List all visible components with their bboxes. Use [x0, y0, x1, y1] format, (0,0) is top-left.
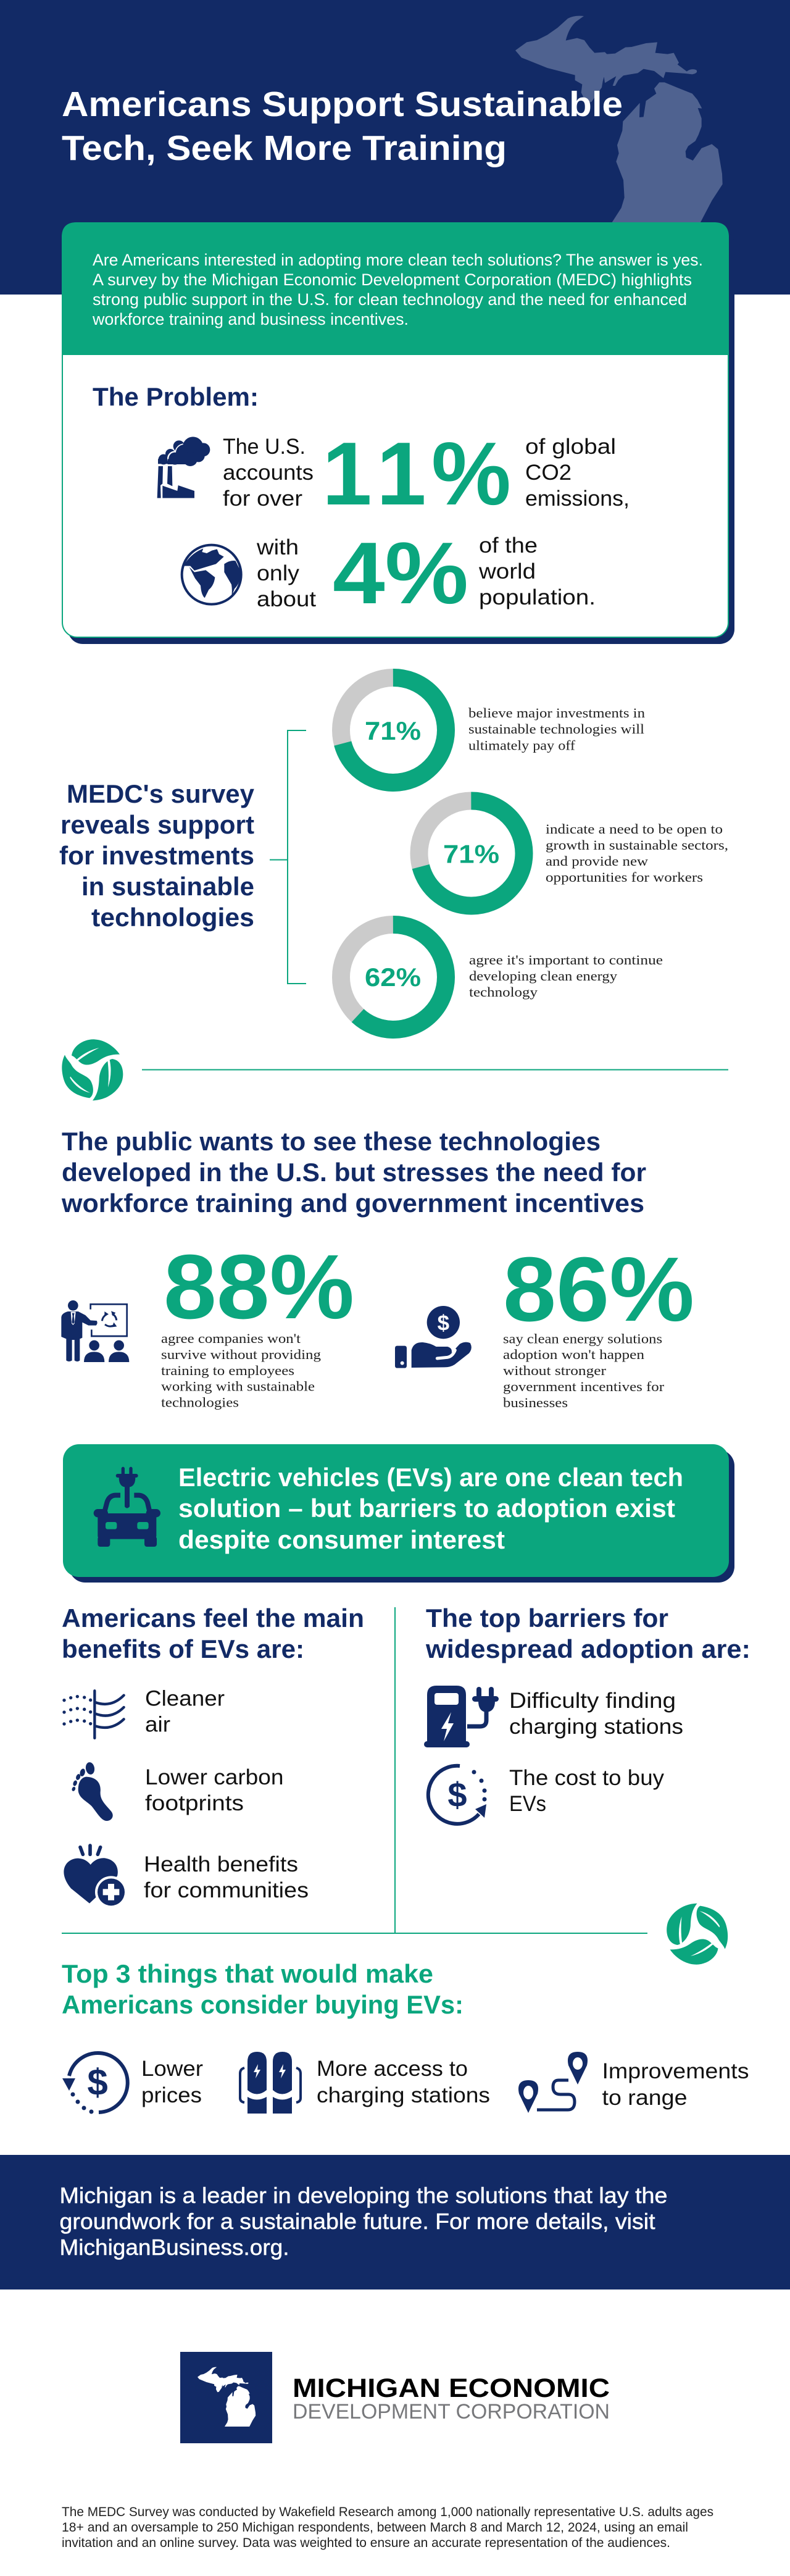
intro text block: workforce training and business incentives.	[92, 310, 409, 328]
text: donut 1 description	[468, 705, 645, 753]
stat: 86 percent: businesses	[503, 1395, 568, 1410]
icon: lower prices: $	[87, 2062, 108, 2103]
closing text: groundwork for a sustainable future. For more details, visit	[59, 2209, 655, 2234]
text: more access: More access to	[317, 2057, 468, 2081]
stat: 11 percent: for over	[223, 487, 302, 511]
text: donut 2 description: and provide new	[546, 853, 648, 869]
text: donut 2 description: opportunities for workers	[546, 869, 703, 885]
heading: public wants these technologies: The public wants to see these technologies	[62, 1127, 601, 1156]
stat: 4 percent: about	[257, 587, 316, 611]
stat: 4 percent: 4%	[333, 524, 468, 622]
footnote: survey methodology: The MEDC Survey was conducted by Wakefield Research among 1,000 nationally representative U.S. adults ages	[62, 2505, 713, 2519]
stat: 88 percent: agree companies won't	[161, 1331, 301, 1346]
closing text: MichiganBusiness.org.	[59, 2235, 289, 2260]
logo: Michigan Economic Development Corporation	[180, 2352, 610, 2443]
icon: hand holding dollar	[395, 1306, 472, 1368]
text: donut 2 description: growth in sustainable sectors,	[546, 837, 728, 853]
donut: 71 percent growth: 71%	[443, 840, 499, 868]
text: improvements	[602, 2059, 749, 2110]
text: health benefits	[144, 1852, 309, 1902]
stat: 4 percent: world	[478, 559, 536, 583]
stat: 88 percent	[161, 1236, 354, 1410]
stat: 11 percent: The U.S.	[223, 435, 306, 459]
stat: 4 percent: population.	[479, 585, 596, 609]
icon: factory emissions	[157, 437, 210, 498]
banner text: Electric vehicles (EVs) are one clean tech	[178, 1463, 683, 1492]
stat: 11 percent: 11%	[322, 424, 511, 524]
text: lower prices: prices	[141, 2083, 202, 2107]
text: improvements: Improvements	[602, 2059, 749, 2083]
donut: 71 percent investments pay off	[341, 678, 446, 783]
icon: cleaner air	[62, 1691, 124, 1738]
heading: benefits	[62, 1604, 364, 1663]
heading: MEDC survey	[59, 779, 255, 932]
icon: Michigan silhouette	[515, 16, 723, 222]
panel: closing statement band	[0, 2155, 790, 2290]
text: lower carbon: Lower carbon	[145, 1765, 284, 1789]
icon: leaf badge	[667, 1904, 728, 1965]
heading: top 3 things: Americans consider buying EVs:	[62, 1990, 464, 2019]
banner text: despite consumer interest	[178, 1525, 505, 1554]
stat: 86 percent: adoption won't happen	[503, 1347, 644, 1362]
logo: Michigan Economic Development Corporation: MICHIGAN ECONOMIC	[293, 2373, 610, 2403]
text: donut 1 description: sustainable technologies will	[468, 721, 644, 737]
heading: MEDC survey: technologies	[91, 903, 254, 932]
text: donut 1 description: ultimately pay off	[468, 737, 576, 753]
stat: 88 percent: training to employees	[161, 1363, 294, 1378]
stat: 11 percent: CO2	[525, 461, 572, 485]
text: more access: charging stations	[317, 2083, 490, 2107]
text: health benefits: Health benefits	[144, 1852, 298, 1876]
panel: the problem card	[62, 222, 734, 644]
text: donut 2 description: indicate a need to be open to	[546, 821, 723, 837]
logo: Michigan Economic Development Corporation: DEVELOPMENT CORPORATION	[293, 2400, 610, 2423]
footnote: survey methodology: 18+ and an oversample to 250 Michigan respondents, between March 8 and March 12, 2024, using an email	[62, 2520, 688, 2535]
stat: 88 percent: working with sustainable	[161, 1378, 315, 1394]
heading: MEDC survey: for investments	[59, 841, 254, 870]
stat: 88 percent: 88%	[164, 1236, 354, 1338]
text: charging stations: Difficulty finding	[509, 1689, 676, 1713]
heading: public wants these technologies	[61, 1127, 646, 1218]
heading: barriers: The top barriers for	[426, 1604, 668, 1633]
heading: barriers: widespread adoption are:	[425, 1634, 750, 1663]
text: charging stations: charging stations	[509, 1715, 683, 1739]
stat: 11 percent: of global	[525, 435, 616, 459]
title: Americans Support Sustainable	[62, 85, 623, 124]
icon: lower prices	[62, 2053, 128, 2114]
text: cleaner air: Cleaner	[145, 1687, 225, 1710]
text: lower carbon: footprints	[145, 1791, 244, 1815]
text: donut 2 description	[546, 821, 728, 885]
stat: 11 percent: accounts	[223, 461, 314, 485]
text: lower carbon	[145, 1765, 284, 1815]
stat: 86 percent: government incentives for	[503, 1379, 665, 1394]
stat: 11 percent: emissions,	[525, 487, 630, 511]
text: improvements: to range	[602, 2086, 688, 2110]
donut: 62 percent clean energy	[341, 925, 446, 1030]
text: health benefits: for communities	[144, 1878, 309, 1902]
text: donut 3 description: developing clean energy	[469, 968, 617, 984]
closing text	[59, 2183, 668, 2260]
intro text block	[62, 222, 729, 355]
icon: electric car with plug	[94, 1467, 160, 1547]
icon: dollar cycle	[428, 1766, 486, 1824]
panel: benefits of EVs	[62, 1604, 364, 1908]
heading: MEDC survey: in sustainable	[81, 872, 254, 901]
stat: 4 percent	[256, 524, 596, 622]
text: donut 3 description: technology	[469, 984, 538, 1000]
heading: barriers	[425, 1604, 750, 1663]
stat: 4 percent: of the	[479, 533, 538, 558]
icon: dollar cycle: $	[447, 1775, 467, 1814]
icon: leaf badge	[62, 1039, 123, 1100]
stat: 4 percent: with	[256, 535, 299, 559]
banner text	[178, 1463, 683, 1554]
footnote: survey methodology: invitation and an online survey. Data was weighted to ensure an accurate representation of the audiences.	[62, 2536, 670, 2550]
donut: 71 percent investments pay off: 71%	[365, 716, 421, 745]
panel: MEDC survey support	[59, 678, 728, 1030]
panel: barriers to adoption	[424, 1604, 750, 1824]
text: lower prices: Lower	[141, 2057, 203, 2081]
text: cost to buy	[509, 1766, 665, 1816]
heading: MEDC survey: reveals support	[60, 810, 254, 839]
heading: public wants these technologies: developed in the U.S. but stresses the need for	[62, 1158, 646, 1187]
donut: 71 percent growth	[419, 801, 524, 906]
stat: 86 percent: without stronger	[503, 1363, 607, 1378]
icon: heart with plus	[64, 1846, 127, 1908]
footnote: survey methodology	[62, 2505, 713, 2550]
text: charging stations	[509, 1689, 683, 1739]
text: cleaner air: air	[145, 1713, 170, 1736]
panel: top 3 things	[62, 1959, 749, 2114]
icon: charging station	[424, 1686, 499, 1747]
text: cleaner air	[145, 1687, 225, 1736]
text: cost to buy: EVs	[509, 1792, 546, 1816]
icon: hand holding dollar: $	[438, 1311, 449, 1335]
text: more access	[317, 2057, 490, 2107]
heading: MEDC survey: MEDC's survey	[67, 779, 255, 808]
stat: 11 percent	[223, 424, 630, 524]
donut: 62 percent clean energy: 62%	[365, 963, 421, 992]
stat: 4 percent: only	[257, 561, 300, 585]
text: donut 1 description: believe major investments in	[468, 705, 645, 721]
intro text block: Are Americans interested in adopting more clean tech solutions? The answer is yes.	[93, 251, 703, 269]
heading: public wants these technologies: workforce training and government incentives	[61, 1189, 644, 1218]
text: lower prices	[141, 2057, 203, 2107]
heading: top 3 things: Top 3 things that would make	[62, 1959, 433, 1988]
banner text: solution – but barriers to adoption exist	[178, 1494, 675, 1523]
icon: footprint	[71, 1762, 113, 1821]
panel: header band	[0, 0, 790, 295]
heading: top 3 things	[62, 1959, 464, 2019]
intro text block: A survey by the Michigan Economic Development Corporation (MEDC) highlights	[93, 270, 692, 289]
stat: 88 percent: survive without providing	[161, 1347, 321, 1362]
text: cost to buy: The cost to buy	[509, 1766, 665, 1790]
intro text block: strong public support in the U.S. for clean technology and the need for enhanced	[93, 290, 687, 309]
icon: globe	[182, 545, 241, 604]
icon: charging stations access	[240, 2052, 301, 2114]
icon: route with pins	[518, 2052, 588, 2113]
stat: 86 percent: 86%	[503, 1239, 694, 1340]
icon: trainer and students	[61, 1300, 129, 1362]
heading: The Problem: The Problem:	[93, 382, 259, 411]
title: Tech, Seek More Training	[62, 128, 507, 168]
closing text: Michigan is a leader in developing the solutions that lay the	[59, 2183, 668, 2208]
stat: 88 percent: technologies	[161, 1394, 239, 1410]
bracket connector	[270, 730, 306, 984]
stat: 86 percent	[503, 1239, 694, 1410]
text: donut 3 description	[469, 952, 663, 1000]
callout: electric vehicles banner	[63, 1444, 734, 1583]
stat: 86 percent: say clean energy solutions	[503, 1331, 662, 1346]
text: donut 3 description: agree it's important to continue	[469, 952, 663, 968]
title	[62, 85, 623, 168]
heading: benefits: Americans feel the main	[62, 1604, 364, 1633]
heading: benefits: benefits of EVs are:	[62, 1634, 304, 1663]
